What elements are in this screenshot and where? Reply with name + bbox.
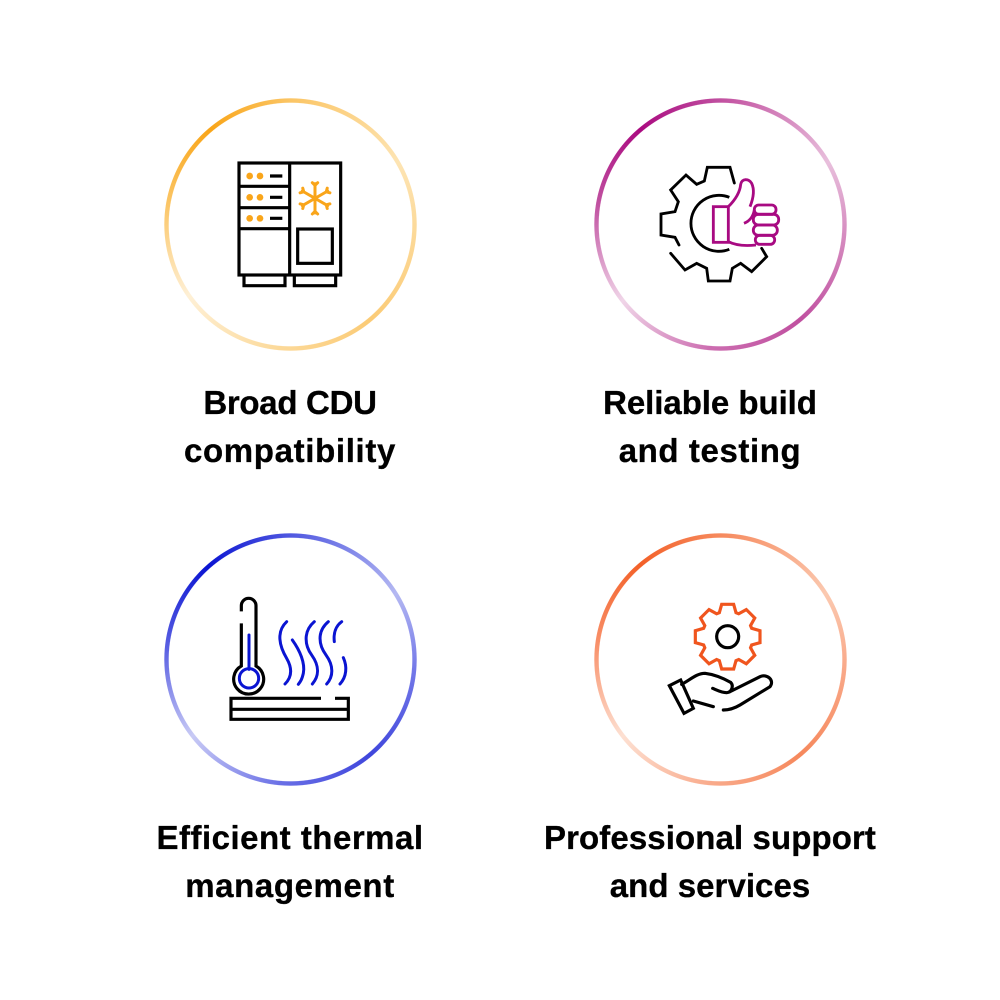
ring: blue gradient bbox=[164, 532, 416, 786]
heading: Reliable build and testing: Reliable build bbox=[603, 384, 817, 421]
panel: reliable build and testing bbox=[594, 98, 847, 470]
heading: Professional support and services: Professional support bbox=[544, 819, 876, 856]
heading: Efficient thermal management: management bbox=[185, 867, 395, 904]
heading: Reliable build and testing: and testing bbox=[619, 432, 801, 469]
icon: hand holding gear bbox=[667, 602, 774, 716]
panel: professional support and services bbox=[544, 533, 876, 904]
panel: efficient thermal management bbox=[156, 533, 424, 904]
heading: Professional support and services bbox=[544, 819, 876, 904]
heading: Efficient thermal management: Efficient thermal bbox=[156, 819, 424, 856]
heading: Reliable build and testing bbox=[603, 384, 817, 470]
ring: coral gradient bbox=[594, 532, 847, 786]
heading: Broad CDU compatibility: Broad CDU bbox=[203, 384, 377, 421]
heading: Broad CDU compatibility: compatibility bbox=[184, 432, 396, 469]
panel: broad CDU compatibility bbox=[164, 98, 417, 470]
heading: Efficient thermal management bbox=[156, 819, 424, 904]
ring: magenta gradient bbox=[594, 98, 847, 350]
ring: orange gradient bbox=[164, 98, 416, 350]
heading: Broad CDU compatibility bbox=[184, 384, 396, 470]
icon: server rack with cooling unit bbox=[237, 161, 342, 288]
icon: thermometer and heat waves bbox=[229, 596, 350, 721]
icon: gear with thumbs up bbox=[660, 166, 780, 282]
heading: Professional support and services: and services bbox=[610, 867, 810, 904]
